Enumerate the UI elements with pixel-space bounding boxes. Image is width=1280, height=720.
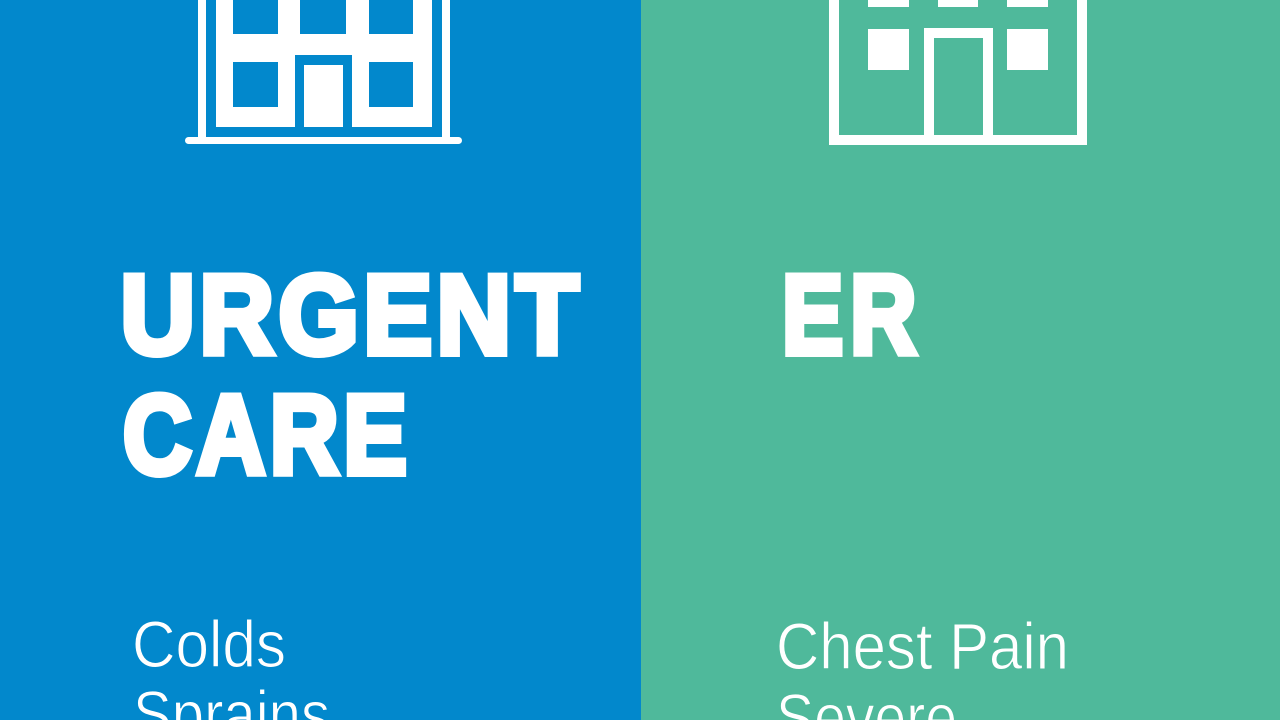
icon: er building [829, 0, 1087, 145]
heading: urgent care: CARE [123, 373, 407, 498]
panel: urgent care [0, 0, 641, 720]
icon: urgent care building [185, 0, 462, 144]
text block: urgent care conditions: Colds [132, 607, 286, 681]
heading: urgent care: URGENT [120, 253, 579, 377]
text block: er conditions: Chest Pain [776, 609, 1069, 683]
panel: er [641, 0, 1280, 720]
text block: urgent care conditions [132, 607, 330, 720]
heading: er: ER [782, 252, 916, 378]
heading: urgent care [120, 253, 579, 498]
text block: er conditions [776, 609, 1069, 720]
